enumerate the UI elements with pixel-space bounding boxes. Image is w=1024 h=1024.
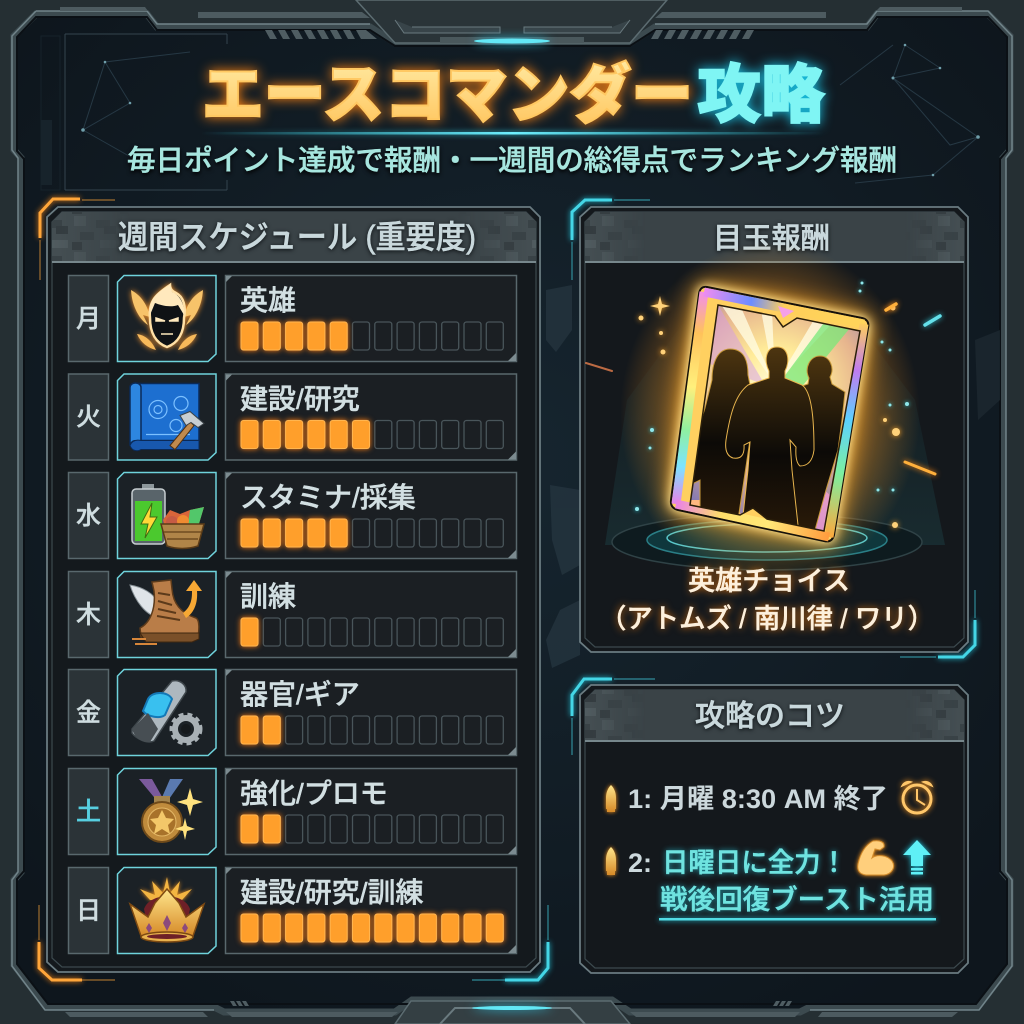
subtitle: 毎日ポイント達成で報酬・一週間の総得点でランキング報酬: [127, 145, 897, 177]
row: monday: [68, 276, 516, 362]
panel: tips: [580, 685, 968, 973]
day: sunday: 日: [76, 897, 101, 925]
icon: crown: [130, 877, 204, 942]
top band bars: [60, 7, 962, 18]
card body: [671, 287, 868, 541]
reward name: 英雄チョイス: [688, 566, 850, 596]
tip 1 text: 1: 月曜 8:30 AM 終了: [628, 784, 888, 814]
icon: alarm clock: [902, 782, 932, 813]
card inner frame: [690, 305, 860, 531]
importance bar: 6 of 12: [241, 420, 503, 448]
panel accent corners: [39, 199, 975, 980]
center silhouette: [726, 347, 814, 545]
card rays: [722, 306, 830, 375]
reward name: （アトムズ / 南川律 / ワリ）: [600, 604, 934, 634]
label: enhancement and promotion: 強化/プロモ: [240, 778, 388, 809]
rainbow frame edges: [676, 292, 864, 537]
day: wednesday: 水: [76, 502, 101, 530]
tip 2: [606, 840, 936, 920]
title divider: [200, 132, 825, 134]
icon: blueprint and hammer: [130, 383, 204, 451]
top center plate: [356, 0, 667, 44]
row: thursday: [68, 572, 516, 658]
panel: weekly schedule: [47, 207, 540, 972]
label: construction, research and training: 建設/研究/訓練: [240, 877, 424, 908]
schedule header: 週間スケジュール (重要度): [118, 219, 476, 255]
label: construction and research: 建設/研究: [240, 384, 360, 414]
light beam: [605, 300, 945, 545]
icon: organ capsule and gear: [132, 681, 201, 744]
row: sunday: [68, 868, 516, 954]
background constellation: [41, 34, 980, 190]
reward name: [600, 566, 934, 634]
label: organ and gear: 器官/ギア: [240, 679, 360, 710]
hatch marks: [230, 30, 792, 1006]
tip 1: [606, 782, 932, 814]
day: saturday: 土: [76, 798, 101, 826]
day: monday: 月: [76, 305, 101, 333]
icon: up arrow: [903, 840, 931, 874]
right silhouette: [790, 356, 846, 528]
title: エースコマンダー: [202, 59, 693, 131]
row: saturday: [68, 768, 516, 854]
label: training: 訓練: [240, 581, 296, 612]
day: thursday: 木: [76, 601, 101, 629]
icon: battery and basket: [132, 484, 204, 548]
row: wednesday: [68, 472, 516, 558]
importance bar: 5 of 12: [241, 322, 503, 350]
schedule header: [52, 212, 536, 263]
icon: bullet: [606, 847, 616, 875]
label: hero: 英雄: [240, 285, 296, 316]
underline: [659, 918, 936, 920]
row: friday: [68, 670, 516, 756]
tip 2 detail: 戦後回復ブースト活用: [660, 885, 934, 915]
platform: [612, 514, 922, 570]
sparkles: [586, 282, 940, 528]
importance bar: 5 of 12: [241, 519, 503, 547]
tips header: [585, 690, 964, 742]
row: tuesday: [68, 374, 516, 460]
hero card: [660, 285, 880, 550]
importance bar: 2 of 12: [241, 716, 503, 744]
importance bar: 1 of 12: [241, 618, 503, 646]
icon: flexed arm: [858, 841, 894, 875]
tip 2 number: 2:: [628, 848, 652, 878]
background map: [546, 285, 1000, 668]
icon: medal with sparkles: [139, 779, 203, 842]
reward header: [585, 212, 964, 263]
left silhouette: [694, 348, 750, 514]
day: tuesday: 火: [76, 404, 101, 432]
day: friday: 金: [76, 699, 101, 727]
card art: [690, 306, 859, 530]
importance bar: 12 of 12: [241, 914, 503, 942]
icon: bullet: [606, 785, 616, 812]
importance bar: 2 of 12: [241, 815, 503, 843]
icon: winged boot: [130, 580, 202, 644]
title: 攻略: [697, 59, 825, 131]
label: stamina and gathering: スタミナ/採集: [240, 482, 416, 513]
panel: featured reward: [580, 207, 968, 652]
bottom center plate: [395, 1001, 630, 1024]
icon: hero: [131, 285, 203, 350]
tips header: 攻略のコツ: [695, 700, 845, 733]
reward header: 目玉報酬: [713, 222, 830, 255]
card glow: [620, 242, 920, 586]
tip 2 highlight: 日曜日に全力！: [662, 848, 847, 878]
